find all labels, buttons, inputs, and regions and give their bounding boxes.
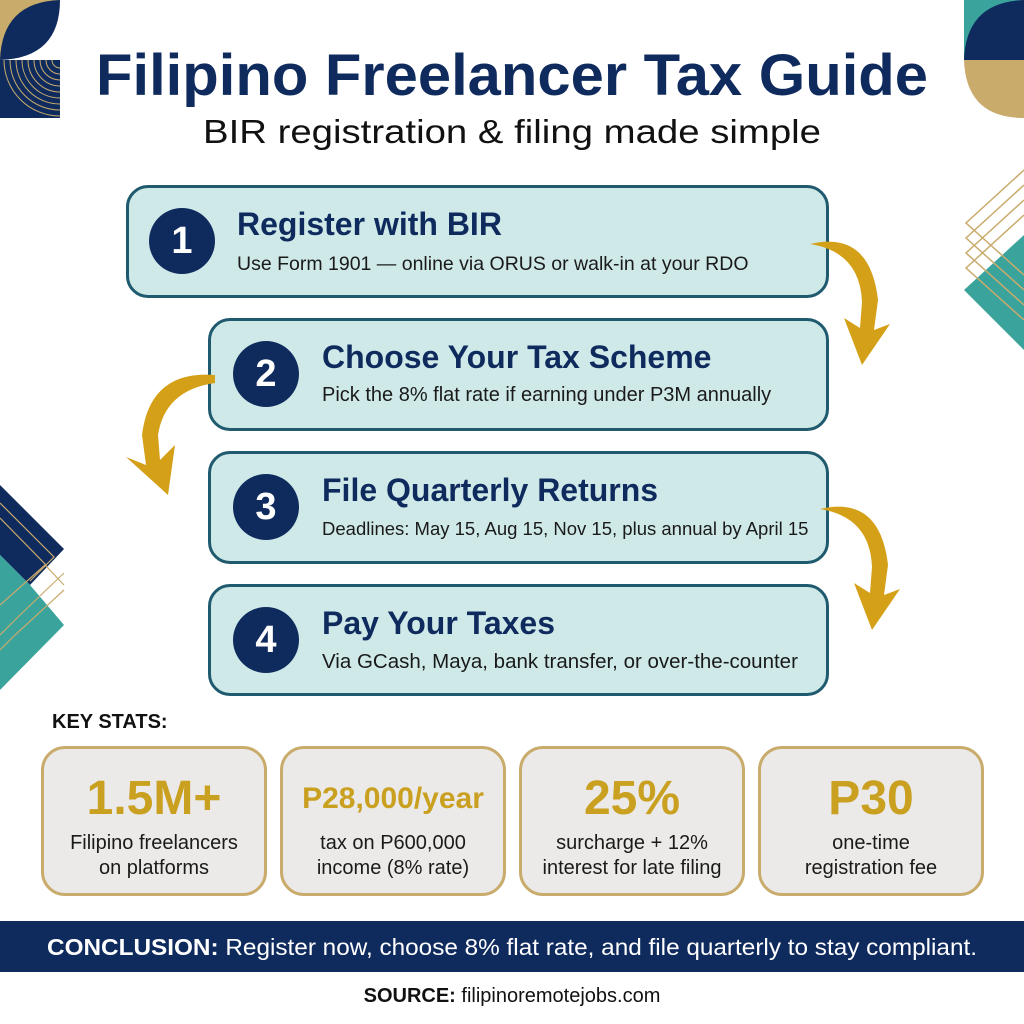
step 1 card: Use Form 1901 — online via ORUS or walk-in at your RDO [237, 253, 749, 275]
step 1 card: 1 [171, 220, 193, 262]
step 4 card: Pay Your Taxes [322, 605, 555, 641]
stat 2: P28,000/year [302, 782, 484, 815]
decoration: top-right corner [964, 0, 1024, 118]
stat 1: on platforms [99, 857, 209, 879]
stat 2: income (8% rate) [317, 857, 469, 879]
step 4 card: 4 [255, 619, 277, 661]
step 4 card: Via GCash, Maya, bank transfer, or over-the-counter [322, 650, 798, 673]
arrow 2 [126, 374, 215, 495]
step 1 card [126, 185, 829, 298]
decoration: left diamond [0, 485, 64, 690]
stat 3: surcharge + 12% [556, 832, 708, 854]
step 2 card: 2 [255, 353, 277, 395]
decoration: right diamond [964, 170, 1024, 350]
arrow 1 [810, 242, 890, 365]
stat 2 [280, 746, 506, 896]
step 4 card [208, 584, 829, 696]
key stats heading: KEY STATS: [52, 711, 168, 733]
step 3 card: 3 [255, 486, 277, 528]
stat 4: P30 [828, 772, 914, 825]
subtitle: BIR registration & filing made simple [203, 113, 821, 150]
stat 4: registration fee [805, 857, 937, 879]
step 1 card: Register with BIR [237, 206, 502, 242]
decoration: top-left corner [0, 0, 60, 118]
stat 1: 1.5M+ [87, 772, 221, 825]
stat 3: interest for late filing [542, 857, 721, 879]
stat 2: tax on P600,000 [320, 832, 466, 854]
conclusion bar [0, 921, 1024, 972]
arrow 3 [820, 506, 900, 630]
title [96, 43, 928, 150]
title: Filipino Freelancer Tax Guide [96, 43, 928, 108]
conclusion bar: CONCLUSION: Register now, choose 8% flat rate, and file quarterly to stay compliant. [47, 934, 977, 960]
step 2 card: Pick the 8% flat rate if earning under P3M annually [322, 384, 771, 406]
stat 3 [519, 746, 745, 896]
stat 1: Filipino freelancers [70, 832, 238, 854]
step 3 card: File Quarterly Returns [322, 472, 658, 508]
source: SOURCE: filipinoremotejobs.com [364, 985, 660, 1007]
stat 3: 25% [584, 772, 680, 825]
step 3 card [208, 451, 829, 564]
stat 4 [758, 746, 984, 896]
step 2 card [208, 318, 829, 431]
step 2 card: Choose Your Tax Scheme [322, 339, 711, 375]
stat 4: one-time [832, 832, 910, 854]
step 3 card: Deadlines: May 15, Aug 15, Nov 15, plus annual by April 15 [322, 518, 808, 539]
stat 1 [41, 746, 267, 896]
